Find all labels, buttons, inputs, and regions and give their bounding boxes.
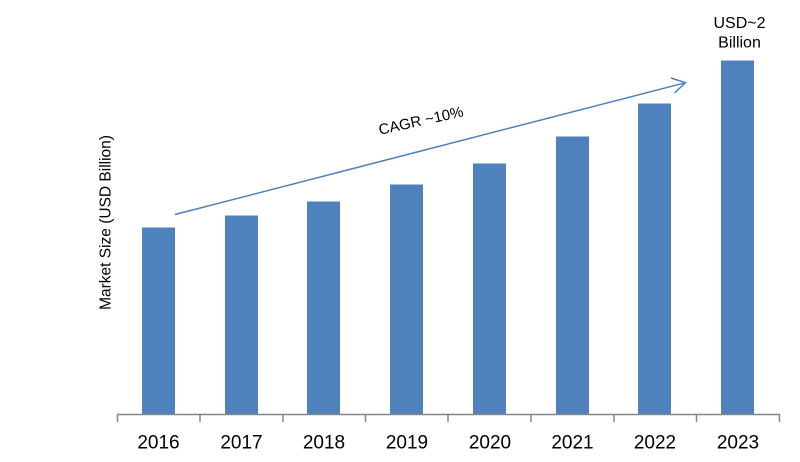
y axis title: Market Size (USD Billion) <box>98 135 114 310</box>
CAGR label: CAGR ~10% <box>377 103 465 139</box>
year labels: 2021 <box>551 432 594 454</box>
callout: final value <box>713 15 766 52</box>
year labels: 2023 <box>717 432 759 454</box>
callout: final value: Billion <box>718 34 761 52</box>
year labels: 2020 <box>469 432 511 454</box>
bars <box>142 60 754 415</box>
year labels: 2018 <box>303 432 345 454</box>
year labels: 2016 <box>137 432 180 454</box>
year labels: 2017 <box>220 432 263 454</box>
x axis <box>117 414 780 422</box>
year labels <box>137 432 759 454</box>
year labels: 2022 <box>634 432 676 454</box>
callout: final value: USD~2 <box>713 15 766 32</box>
arrow: CAGR trend <box>175 78 686 214</box>
year labels: 2019 <box>386 432 428 454</box>
